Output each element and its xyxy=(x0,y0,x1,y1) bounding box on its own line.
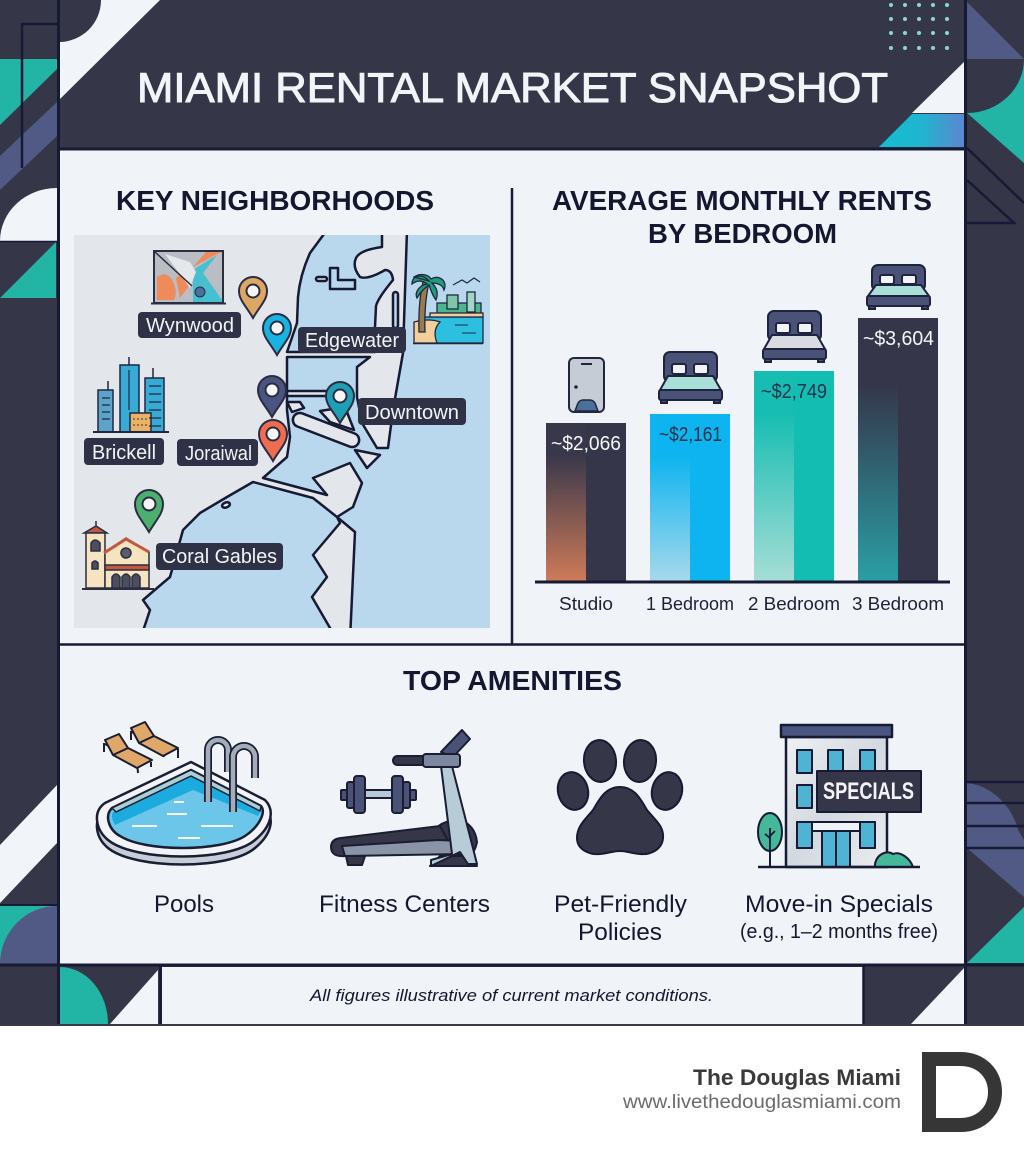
bar: 1 bedroom: ~$2,161 xyxy=(659,424,722,446)
pin: Edgewater xyxy=(263,314,291,355)
label: Pet-Friendly Policies: Policies xyxy=(578,919,662,946)
pin: Joraiwal xyxy=(259,420,287,461)
icon: bed 2 xyxy=(763,311,826,362)
map xyxy=(74,230,500,640)
icon: beach and palm xyxy=(412,275,483,344)
bar: studio xyxy=(546,423,626,582)
pin: Brickell xyxy=(258,376,286,417)
label: Edgewater: Edgewater xyxy=(305,330,399,352)
title: MIAMI RENTAL MARKET SNAPSHOT xyxy=(137,64,888,111)
panel: key neighborhoods xyxy=(74,185,500,640)
icon: fitness equipment xyxy=(331,730,477,866)
bar: 1 bedroom xyxy=(650,414,730,582)
footnote box: All figures illustrative of current market conditions. xyxy=(309,986,713,1005)
icon: bed 3 xyxy=(867,265,930,309)
label: Downtown: Downtown xyxy=(365,402,459,424)
heading: top amenities: TOP AMENITIES xyxy=(403,665,622,696)
sign text: SPECIALS xyxy=(823,778,914,805)
brand block xyxy=(622,1059,995,1125)
icon: bed 1 xyxy=(659,352,722,403)
label: Coral Gables: Coral Gables xyxy=(162,546,277,568)
icon: paw print xyxy=(554,739,686,854)
label: 1 Bedroom: 1 Bedroom xyxy=(646,594,734,614)
bar: studio: ~$2,066 xyxy=(551,433,621,455)
heading: key neighborhoods: KEY NEIGHBORHOODS xyxy=(116,185,434,216)
icon: Coral Gables church xyxy=(82,521,154,589)
icon: D logo xyxy=(929,1059,995,1125)
heading: average monthly rents by bedroom: AVERAGE MONTHLY RENTS xyxy=(552,185,932,216)
label: Studio: Studio xyxy=(559,594,613,614)
brand url: www.livethedouglasmiami.com xyxy=(622,1092,901,1113)
pin: Coral Gables xyxy=(135,490,163,532)
icon: studio door xyxy=(569,358,604,412)
pin: Downtown xyxy=(326,382,354,423)
pin: Wynwood xyxy=(239,277,267,318)
heading: average monthly rents by bedroom: BY BEDROOM xyxy=(648,218,837,249)
label: 3 Bedroom: 3 Bedroom xyxy=(852,594,944,614)
header band decoration xyxy=(59,0,964,147)
panel: average monthly rents xyxy=(535,185,950,614)
icon: Wynwood mural xyxy=(151,251,226,304)
bar: 3 bedroom: ~$3,604 xyxy=(863,328,934,350)
icon: pool xyxy=(97,722,271,864)
label: Move-in Specials: Move-in Specials xyxy=(745,891,933,918)
decorative left column xyxy=(0,24,57,964)
main content panel xyxy=(60,150,965,965)
label: Pools: Pools xyxy=(154,891,214,918)
bar: 3 bedroom xyxy=(858,318,938,582)
label: Pet-Friendly Policies xyxy=(554,891,687,946)
panel: top amenities xyxy=(97,665,938,946)
icon: Brickell skyline xyxy=(93,357,169,432)
footer decoration xyxy=(60,967,964,1024)
heading: average monthly rents by bedroom xyxy=(552,185,932,249)
footnote box xyxy=(162,967,863,1024)
label: Move-in Specials: (e.g., 1–2 months free) xyxy=(740,921,938,943)
label: Brickell: Brickell xyxy=(92,442,156,464)
decorative right column xyxy=(967,2,1024,963)
brand name: The Douglas Miami xyxy=(693,1065,901,1090)
label: Fitness Centers: Fitness Centers xyxy=(319,891,490,918)
label: Brickell xyxy=(84,438,164,465)
icon: building with specials sign xyxy=(758,725,921,867)
chart axis xyxy=(535,580,950,584)
label: Joraiwal: Joraiwal xyxy=(185,443,252,465)
label: 2 Bedroom: 2 Bedroom xyxy=(748,594,840,614)
bar: 2 bedroom: ~$2,749 xyxy=(761,381,827,403)
label: Pet-Friendly Policies: Pet-Friendly xyxy=(554,891,687,918)
label: Wynwood: Wynwood xyxy=(146,315,234,337)
label: Move-in Specials xyxy=(740,891,938,943)
bar: 2 bedroom xyxy=(754,371,834,582)
